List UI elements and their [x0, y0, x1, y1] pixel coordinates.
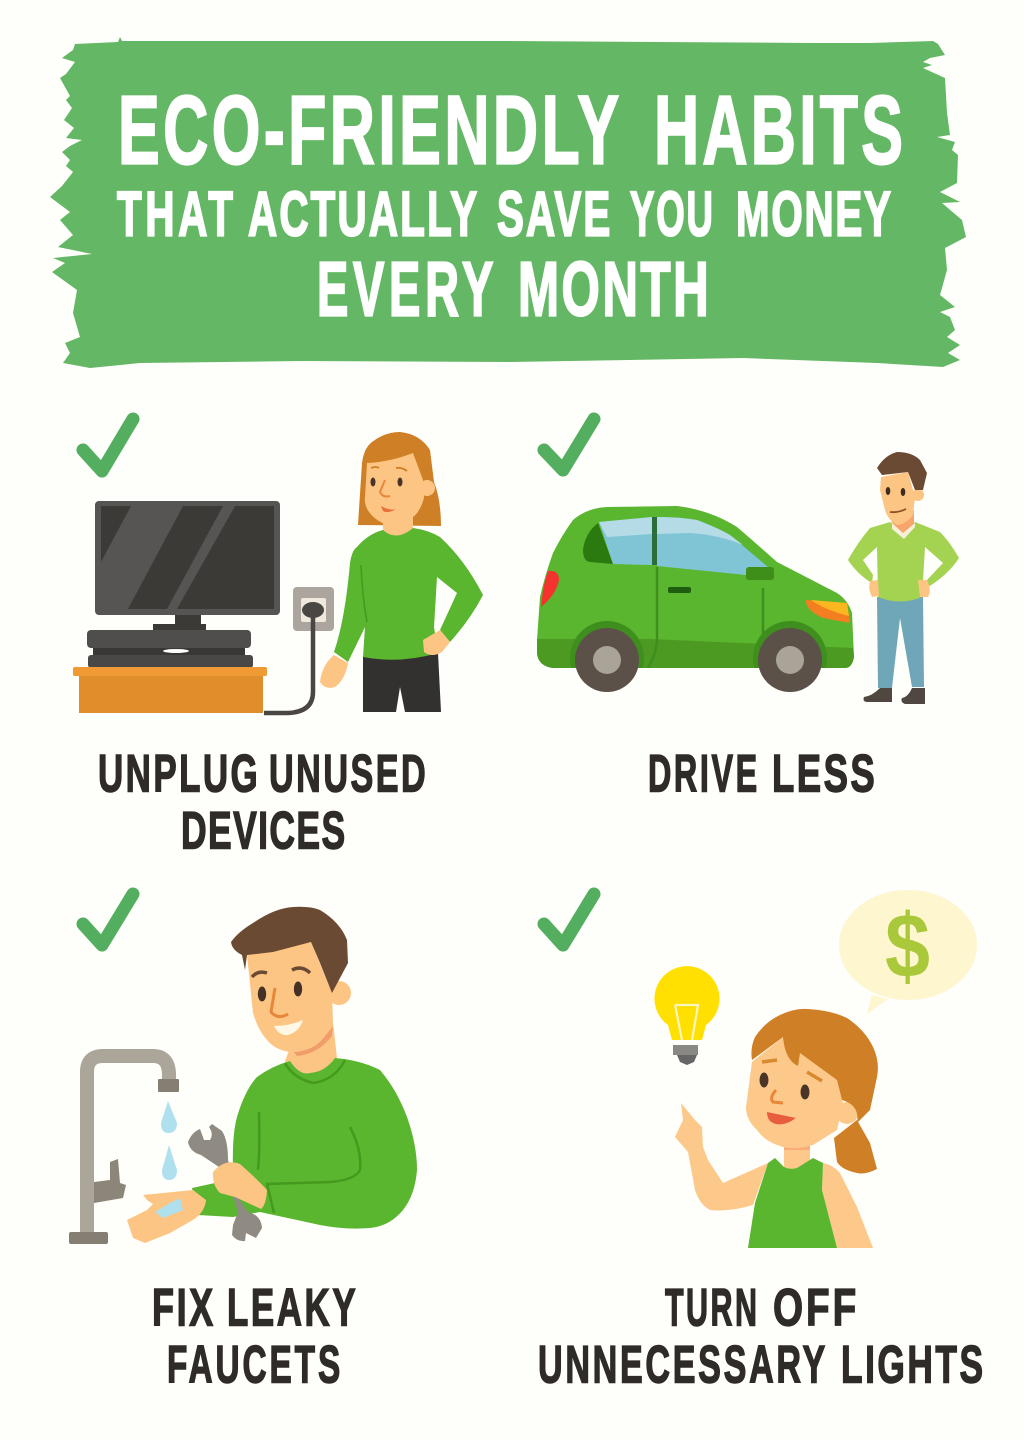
- label: LESS: [772, 744, 875, 803]
- label: FAUCETS: [167, 1336, 340, 1394]
- label: UNNECESSARY: [538, 1336, 825, 1394]
- icon: check mark: [544, 419, 594, 470]
- title banner: [50, 37, 966, 368]
- illustration: man: [848, 452, 959, 704]
- label: [648, 744, 875, 804]
- label: DEVICES: [181, 800, 345, 860]
- label: [98, 743, 426, 860]
- title line 2: [117, 178, 891, 250]
- illustration: woman: [320, 432, 483, 712]
- title line 2: SAVE: [497, 180, 610, 250]
- panel: drive less: [537, 419, 959, 804]
- icon: light bulb: [654, 966, 720, 1065]
- panel: unplug unused devices: [73, 419, 483, 860]
- title line 2: MONEY: [736, 180, 891, 250]
- illustration: wall outlet and cable: [264, 587, 334, 713]
- title line 1: [118, 77, 903, 185]
- title line 2: YOU: [630, 178, 713, 249]
- label: [152, 1277, 356, 1394]
- label: [538, 1278, 983, 1394]
- illustration: television on desk: [73, 501, 280, 713]
- label: TURN: [665, 1279, 757, 1338]
- illustration: faucet and water drops: [69, 1056, 179, 1244]
- illustration: girl pointing: [675, 1009, 878, 1248]
- title line 3: MONTH: [518, 245, 709, 332]
- label: FIX: [152, 1278, 213, 1337]
- icon: speech bubble with dollar: [839, 890, 977, 1014]
- label: DRIVE: [648, 744, 757, 804]
- icon: check mark: [83, 894, 133, 945]
- title line 2: ACTUALLY: [248, 180, 477, 250]
- title line 3: EVERY: [317, 245, 493, 332]
- label: UNUSED: [269, 745, 426, 803]
- illustration: man with wrench: [127, 907, 417, 1243]
- banner brush shape: [50, 37, 966, 368]
- title line 1: HABITS: [654, 77, 903, 185]
- panel: fix leaky faucets: [69, 894, 417, 1394]
- title line 3: [317, 245, 709, 332]
- icon: speech bubble with dollar: $: [885, 896, 930, 997]
- panel: turn off unnecessary lights: [538, 890, 983, 1394]
- label: UNPLUG: [98, 743, 258, 803]
- title line 2: THAT: [117, 180, 233, 250]
- icon: check mark: [83, 419, 133, 471]
- illustration: green car: [537, 506, 854, 700]
- label: LEAKY: [227, 1277, 356, 1337]
- icon: check mark: [544, 894, 594, 945]
- label: LIGHTS: [841, 1334, 983, 1394]
- title line 1: ECO-FRIENDLY: [118, 77, 619, 185]
- label: OFF: [773, 1278, 856, 1337]
